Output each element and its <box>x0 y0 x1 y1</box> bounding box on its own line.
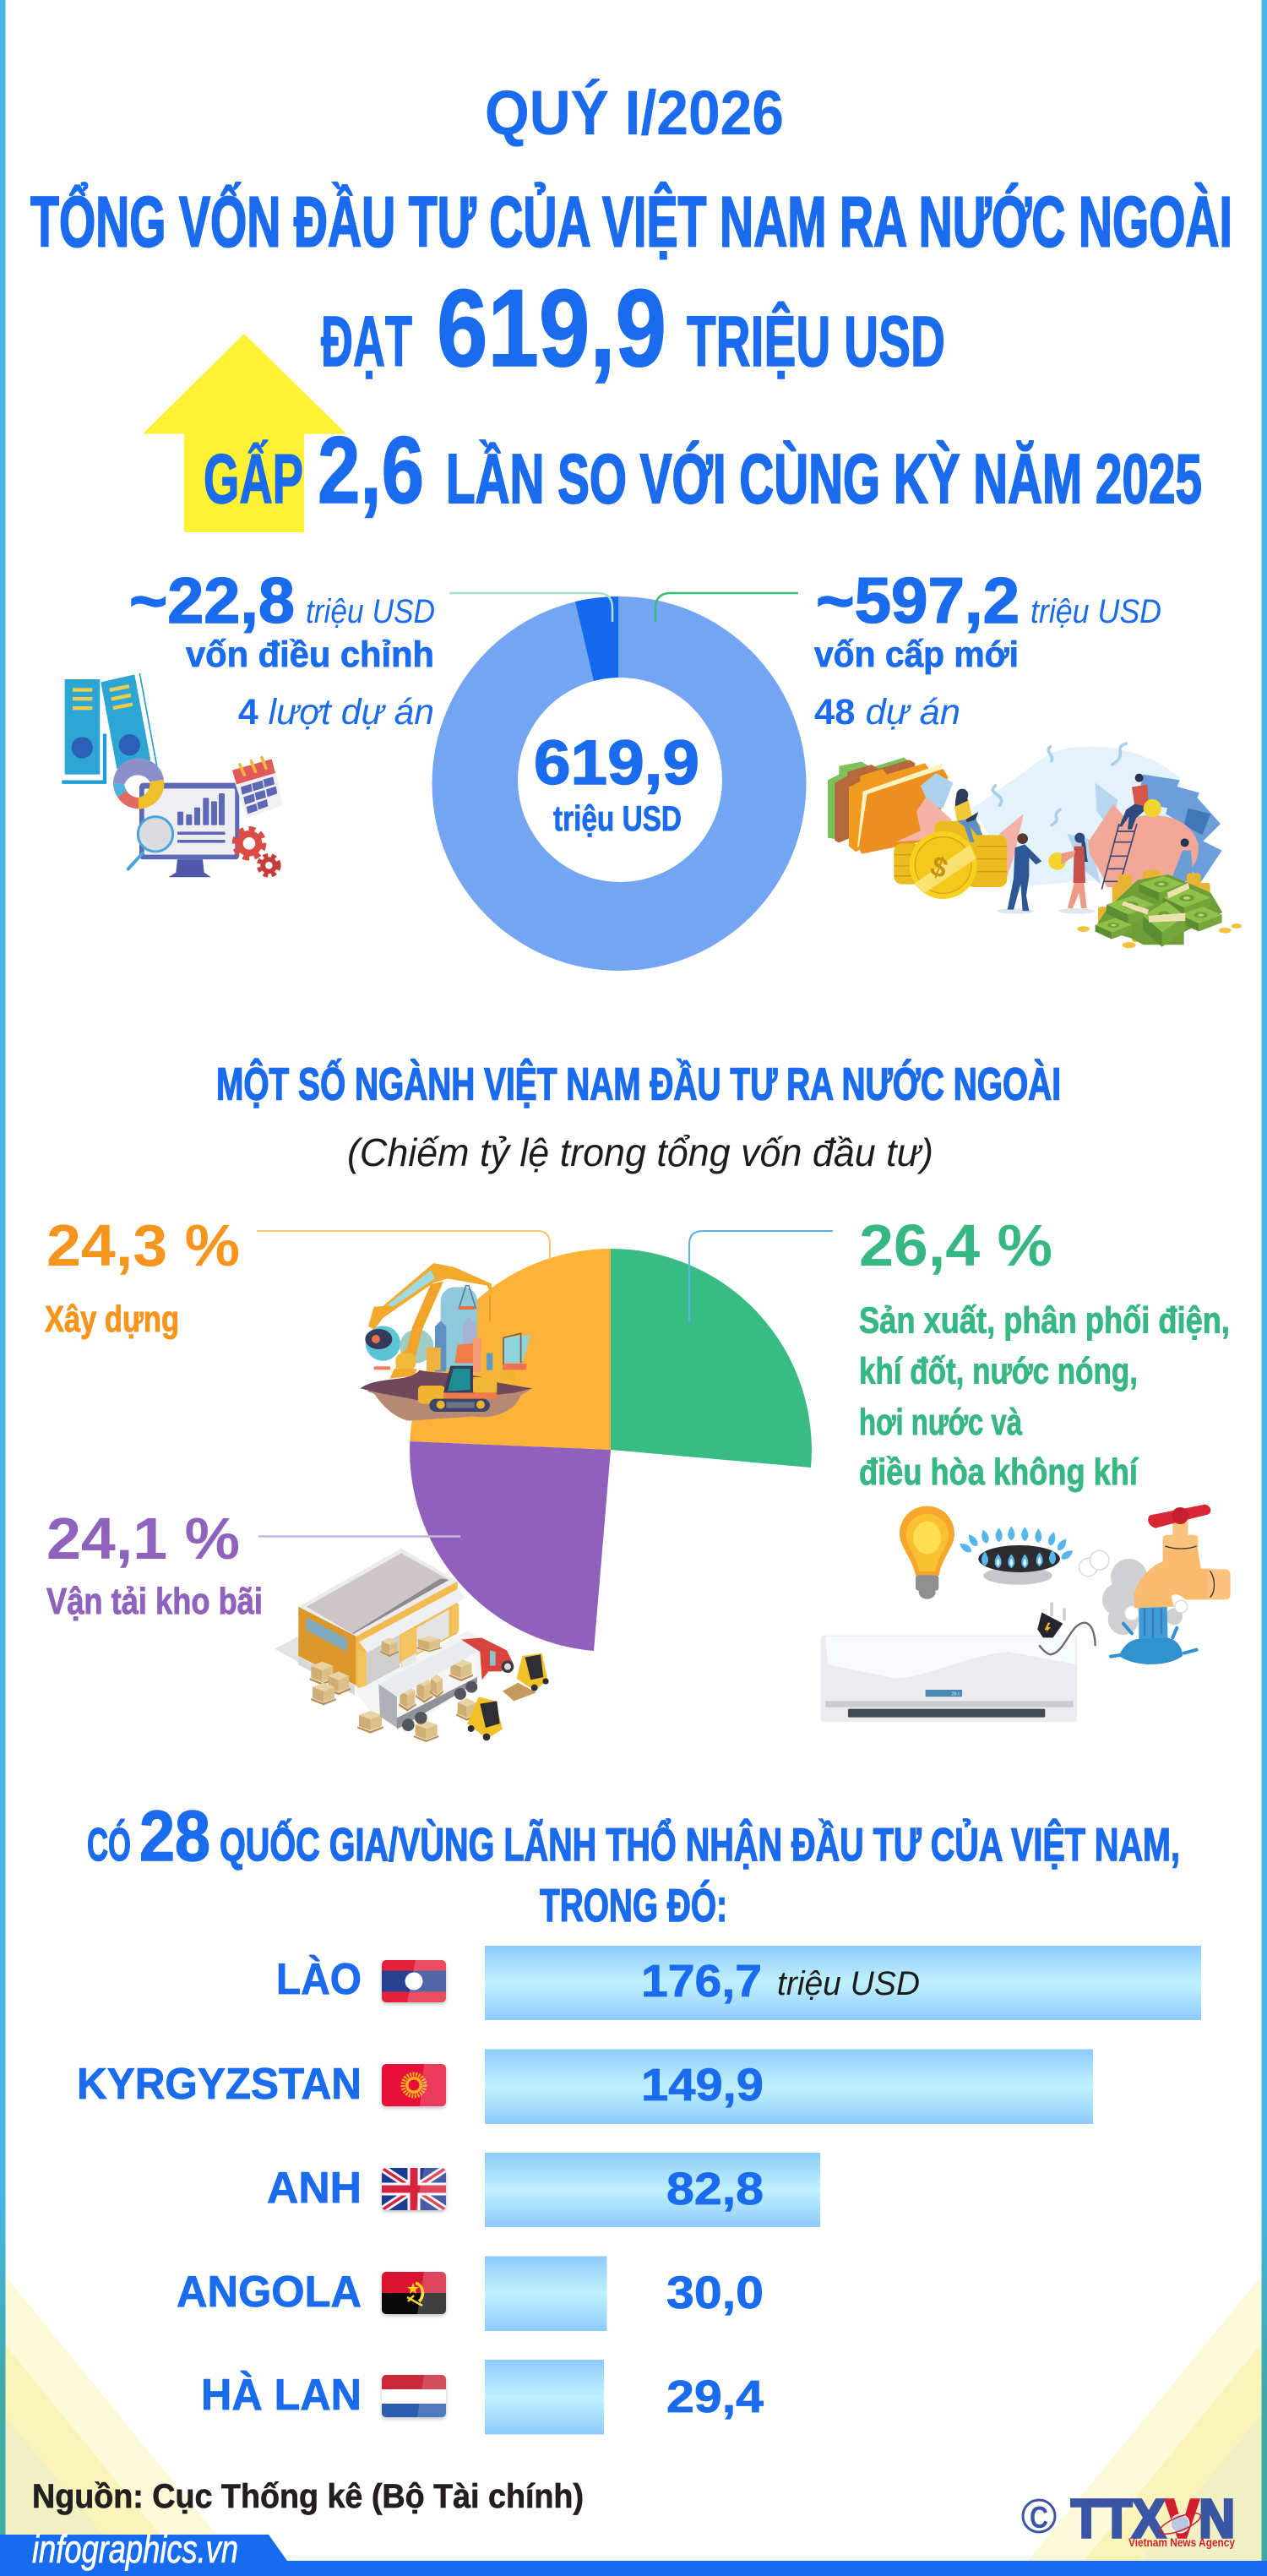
bar row: Angola: ANGOLA <box>177 2268 362 2317</box>
bar chart: countries <box>77 1946 1201 2435</box>
logo: TTXVN <box>1023 2488 1235 2549</box>
project count: 48 dự án <box>814 692 960 732</box>
bar row: Kyrgyzstan <box>77 2050 1093 2124</box>
footer band <box>0 2535 1267 2576</box>
folders <box>828 758 912 839</box>
label: energy line 4: điều hòa không khí <box>859 1451 1139 1493</box>
icon: binders, monitor and charts <box>62 673 282 877</box>
donut hole <box>518 678 722 882</box>
value: transport: 24,1 % <box>46 1506 240 1571</box>
icon: money, folders, coins and piggy bank <box>828 743 1242 948</box>
pie slice: transport and warehousing <box>410 1441 611 1651</box>
leader line: energy <box>689 1231 833 1321</box>
small excavator <box>418 1386 445 1404</box>
copyright mark: C <box>1030 2500 1048 2535</box>
donut chart: total investment <box>432 596 806 971</box>
air conditioner: 26 c <box>952 1692 960 1697</box>
donut centre unit: triệu USD <box>553 798 682 838</box>
leader line: new capital <box>655 593 798 622</box>
piggy bank <box>1088 804 1199 889</box>
title block <box>30 78 1232 523</box>
man on ladder <box>1119 774 1161 830</box>
box stacks <box>310 1662 477 1742</box>
unit: triệu USD <box>1030 593 1161 630</box>
value: construction: 24,3 % <box>46 1212 240 1278</box>
text block: transport <box>46 1506 263 1622</box>
label: energy line 2: khí đốt, nước nóng, <box>859 1350 1138 1392</box>
flag: Laos <box>382 1960 446 2004</box>
label: vốn điều chỉnh <box>186 634 434 675</box>
cash pile <box>1098 870 1210 942</box>
label: energy line 3: hơi nước và <box>859 1402 1022 1443</box>
pie chart: sectors <box>410 1249 812 1651</box>
bar row: Laos: LÀO <box>276 1955 362 2004</box>
text block: adjusted capital <box>129 565 435 732</box>
title: times: GẤP <box>204 438 303 518</box>
truck cab <box>461 1637 513 1680</box>
label: construction: Xây dựng <box>45 1299 179 1340</box>
flag: Kyrgyzstan <box>382 2064 446 2108</box>
agency wordmark: TTXVN <box>1071 2488 1235 2549</box>
bar row: Laos: triệu USD <box>777 1965 920 2002</box>
bar row: Netherlands <box>201 2360 764 2435</box>
bar row: Laos: 176,7 <box>641 1956 762 2007</box>
heading: recipient countries <box>87 1796 1180 1931</box>
flag: United Kingdom <box>382 2168 446 2212</box>
ground <box>367 1370 532 1421</box>
ladder <box>1101 824 1137 890</box>
title: unit: TRIỆU USD <box>687 302 945 381</box>
title: quarter: QUÝ I/2026 <box>485 78 784 148</box>
agency name: Vietnam News Agency <box>1128 2535 1235 2549</box>
donut ring: new capital <box>432 596 806 971</box>
text block: energy <box>859 1212 1230 1493</box>
bar row: Netherlands: HÀ LAN <box>201 2371 362 2420</box>
blue banknotes behind piggy <box>1138 775 1222 885</box>
bar row: Angola: 30,0 <box>666 2268 764 2318</box>
leader line: transport <box>258 1535 460 1538</box>
title: reached: ĐẠT <box>321 302 412 381</box>
man in suit <box>998 833 1041 914</box>
flag: Angola <box>382 2272 446 2316</box>
bar row: United Kingdom: 82,8 <box>666 2164 764 2214</box>
bar row: Kyrgyzstan: KYRGYZSTAN <box>77 2060 362 2109</box>
globe emblem <box>1157 2509 1203 2538</box>
bar row: Netherlands: 29,4 <box>666 2372 764 2422</box>
title: total amount: 619,9 <box>437 266 666 389</box>
bar row: Angola <box>177 2256 764 2331</box>
icon: yellow up arrow <box>143 334 346 532</box>
icon: bulb, gas burner, tap and air conditioner <box>821 1505 1231 1722</box>
excavator boom <box>368 1263 492 1329</box>
light bulb <box>900 1506 954 1599</box>
donut segment: adjusted capital <box>575 596 618 681</box>
decoration: lower right yellow corner <box>1028 2275 1262 2561</box>
woman in red dress <box>1058 833 1096 914</box>
leader line: adjusted capital <box>449 593 612 622</box>
forklift bottom <box>467 1696 503 1740</box>
heading line two: TRONG ĐÓ: <box>540 1879 727 1931</box>
pie slice: construction <box>410 1249 611 1450</box>
text block: new capital <box>814 565 1161 732</box>
heading number: 28: 28 <box>139 1796 210 1876</box>
heading part: has: CÓ <box>87 1818 131 1871</box>
title: multiple: 2,6 <box>318 417 424 523</box>
value: energy: 26,4 % <box>859 1212 1052 1278</box>
bar row: Laos <box>276 1946 1201 2020</box>
forklift right <box>503 1653 549 1701</box>
woman with laptop <box>954 789 982 842</box>
project count: 4 lượt dự án <box>238 692 434 732</box>
coins <box>894 821 1007 887</box>
flag: Netherlands <box>382 2375 446 2419</box>
unit: triệu USD <box>306 593 435 630</box>
leader line: construction <box>257 1231 550 1260</box>
value: adjusted capital: ~22,8 <box>129 565 295 637</box>
decoration: lower left yellow corner <box>5 2275 217 2535</box>
water tap <box>1111 1505 1231 1664</box>
bar row: United Kingdom: ANH <box>267 2164 362 2213</box>
man behind cash <box>1172 838 1194 881</box>
air conditioner <box>821 1636 1077 1722</box>
truck trailer <box>397 1652 477 1726</box>
icon: excavator and construction site <box>361 1263 532 1421</box>
value: new capital: ~597,2 <box>816 565 1020 637</box>
copyright mark <box>1023 2500 1055 2535</box>
label: transport: Vận tải kho bãi <box>46 1581 263 1622</box>
icon: warehouse with truck and forklifts <box>275 1549 549 1742</box>
icon: money, folders, coins and piggy bank: $ <box>927 850 952 885</box>
power plug <box>1037 1604 1096 1654</box>
gold coin in hand <box>1048 852 1066 870</box>
bar row: Kyrgyzstan: 149,9 <box>641 2060 764 2110</box>
subheading: sectors: (Chiếm tỷ lệ trong tổng vốn đầu tư) <box>347 1130 933 1174</box>
source note: Nguồn: Cục Thống kê (Bộ Tài chính) <box>32 2478 584 2515</box>
text block: construction <box>45 1212 240 1340</box>
pie slice: energy <box>611 1249 812 1468</box>
donut centre value: 619,9 <box>534 727 699 798</box>
gas burner <box>958 1527 1075 1585</box>
label: vốn cấp mới <box>814 634 1019 675</box>
footer site name: infographics.vn <box>32 2527 238 2571</box>
bar row: United Kingdom <box>267 2153 820 2227</box>
steam clouds <box>1079 1550 1188 1635</box>
